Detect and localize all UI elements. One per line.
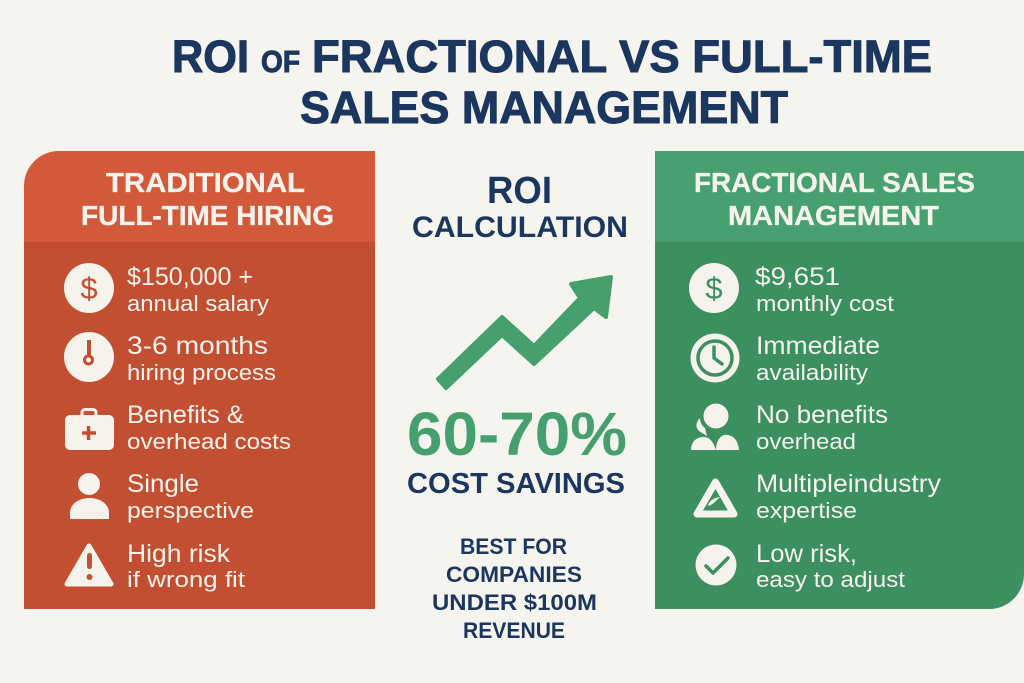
heading: traditional full-time hiring: TRADITIONAL [106,167,305,198]
panel: fractional sales management [655,151,1024,609]
stat: cost savings: COST SAVINGS [407,468,625,500]
text: low risk: Low risk, [756,540,857,568]
text: best for: BEST FOR [460,534,567,559]
title: ROI [172,31,249,82]
icon: medical case [65,410,114,450]
text: benefits: overhead costs [127,429,291,454]
text: best for: REVENUE [463,618,565,643]
heading: fractional sales management: FRACTIONAL SALES [694,167,975,198]
panel: roi calculation [407,170,628,643]
text: high risk: if wrong fit [127,567,246,592]
text: availability: availability [756,360,869,385]
text: no benefits [756,401,888,454]
text: hiring process [127,332,276,385]
text: expertise [756,470,942,523]
text: no benefits: overhead [756,429,856,454]
text: single perspective: Single [127,470,199,498]
text: benefits [127,401,291,454]
icon: check [696,544,736,586]
title [172,31,932,133]
title: SALES MANAGEMENT [300,82,788,133]
panel: traditional full-time hiring [24,151,375,609]
text: single perspective [127,470,254,523]
icon: warning [67,546,111,584]
icon: dollar: $ [80,271,98,306]
heading: roi calculation: ROI [487,170,552,212]
heading: roi calculation [412,170,628,244]
text: high risk [127,540,246,592]
text: benefits: Benefits & [127,401,244,429]
icon: dollar: $ [705,271,723,306]
text: expertise: Multipleindustry [756,470,942,498]
icon: clock [690,334,740,382]
text: hiring process: hiring process [127,360,276,385]
heading: fractional sales management [694,167,975,231]
text: monthly cost: $9,651 [755,263,840,291]
heading: traditional full-time hiring [81,167,334,231]
text: high risk: High risk [127,540,231,568]
icon: triangle [697,482,734,514]
stat: cost savings [407,400,627,500]
text: salary [127,263,270,316]
heading: roi calculation: CALCULATION [412,211,628,244]
text: no benefits: No benefits [756,401,888,429]
icon: rising arrow [438,277,611,388]
icon: dollar [689,263,739,313]
text: best for: UNDER $100M [432,590,597,615]
text: best for [432,534,597,643]
text: availability: Immediate [756,332,880,360]
icon: timer [64,332,114,382]
text: low risk [756,540,906,592]
text: salary: annual salary [127,291,270,316]
text: expertise: expertise [756,498,857,523]
icon: dollar [64,263,114,313]
text: hiring process: 3-6 months [127,332,268,360]
text: salary: $150,000 + [127,263,253,291]
heading: traditional full-time hiring: FULL-TIME HIRING [81,200,334,231]
icon: person [70,473,109,519]
text: single perspective: perspective [127,498,254,523]
title: FRACTIONAL VS FULL-TIME [312,31,932,82]
text: best for: COMPANIES [446,562,582,587]
text: low risk: easy to adjust [756,567,906,592]
heading: fractional sales management: MANAGEMENT [728,200,939,231]
text: monthly cost [755,263,895,316]
stat: cost savings: 60-70% [407,400,627,468]
title: OF [261,44,300,79]
text: availability [756,332,880,385]
text: monthly cost: monthly cost [756,291,895,316]
icon: people [691,404,739,450]
